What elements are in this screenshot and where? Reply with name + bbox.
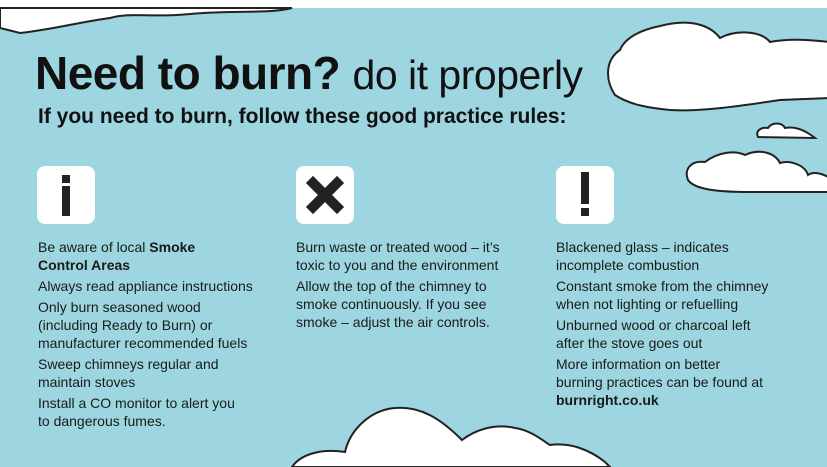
column 3 text: incomplete combustion — [556, 257, 699, 273]
column 1 text: Be aware of local Smoke — [38, 239, 195, 255]
column 3 text: burnright.co.uk — [556, 392, 659, 408]
column 1 text: Always read appliance instructions — [38, 278, 253, 294]
column 3 text: when not lighting or refuelling — [556, 296, 738, 312]
column 1 text: maintain stoves — [38, 374, 135, 390]
icon: info — [37, 166, 95, 224]
title: Need to burn? do it properly — [35, 47, 583, 99]
column 1 text: Control Areas — [38, 257, 130, 273]
column 2 text: Allow the top of the chimney to — [296, 278, 487, 294]
column 2 text: toxic to you and the environment — [296, 257, 498, 273]
column 3 text: Blackened glass – indicates — [556, 239, 729, 255]
column 3 text — [556, 239, 768, 408]
column 1 text: to dangerous fumes. — [38, 413, 166, 429]
column 2 text: Burn waste or treated wood – it’s — [296, 239, 500, 255]
column 1 text: Only burn seasoned wood — [38, 299, 201, 315]
column 1 text: Install a CO monitor to alert you — [38, 395, 235, 411]
icon: exclamation — [556, 166, 614, 224]
column 3 text: burning practices can be found at — [556, 374, 763, 390]
icon: cross — [296, 166, 354, 224]
column 3 text: Unburned wood or charcoal left — [556, 317, 751, 333]
column 2 text: smoke continuously. If you see — [296, 296, 486, 312]
column 1 text: Sweep chimneys regular and — [38, 356, 219, 372]
column 3 text: More information on better — [556, 356, 720, 372]
subtitle: If you need to burn, follow these good practice rules: — [38, 105, 567, 128]
column 1 text — [38, 239, 253, 429]
column 2 text — [296, 239, 500, 330]
column 3 text: after the stove goes out — [556, 335, 702, 351]
column 1 text: manufacturer recommended fuels — [38, 335, 247, 351]
column 3 text: Constant smoke from the chimney — [556, 278, 768, 294]
column 2 text: smoke – adjust the air controls. — [296, 314, 490, 330]
column 1 text: (including Ready to Burn) or — [38, 317, 212, 333]
